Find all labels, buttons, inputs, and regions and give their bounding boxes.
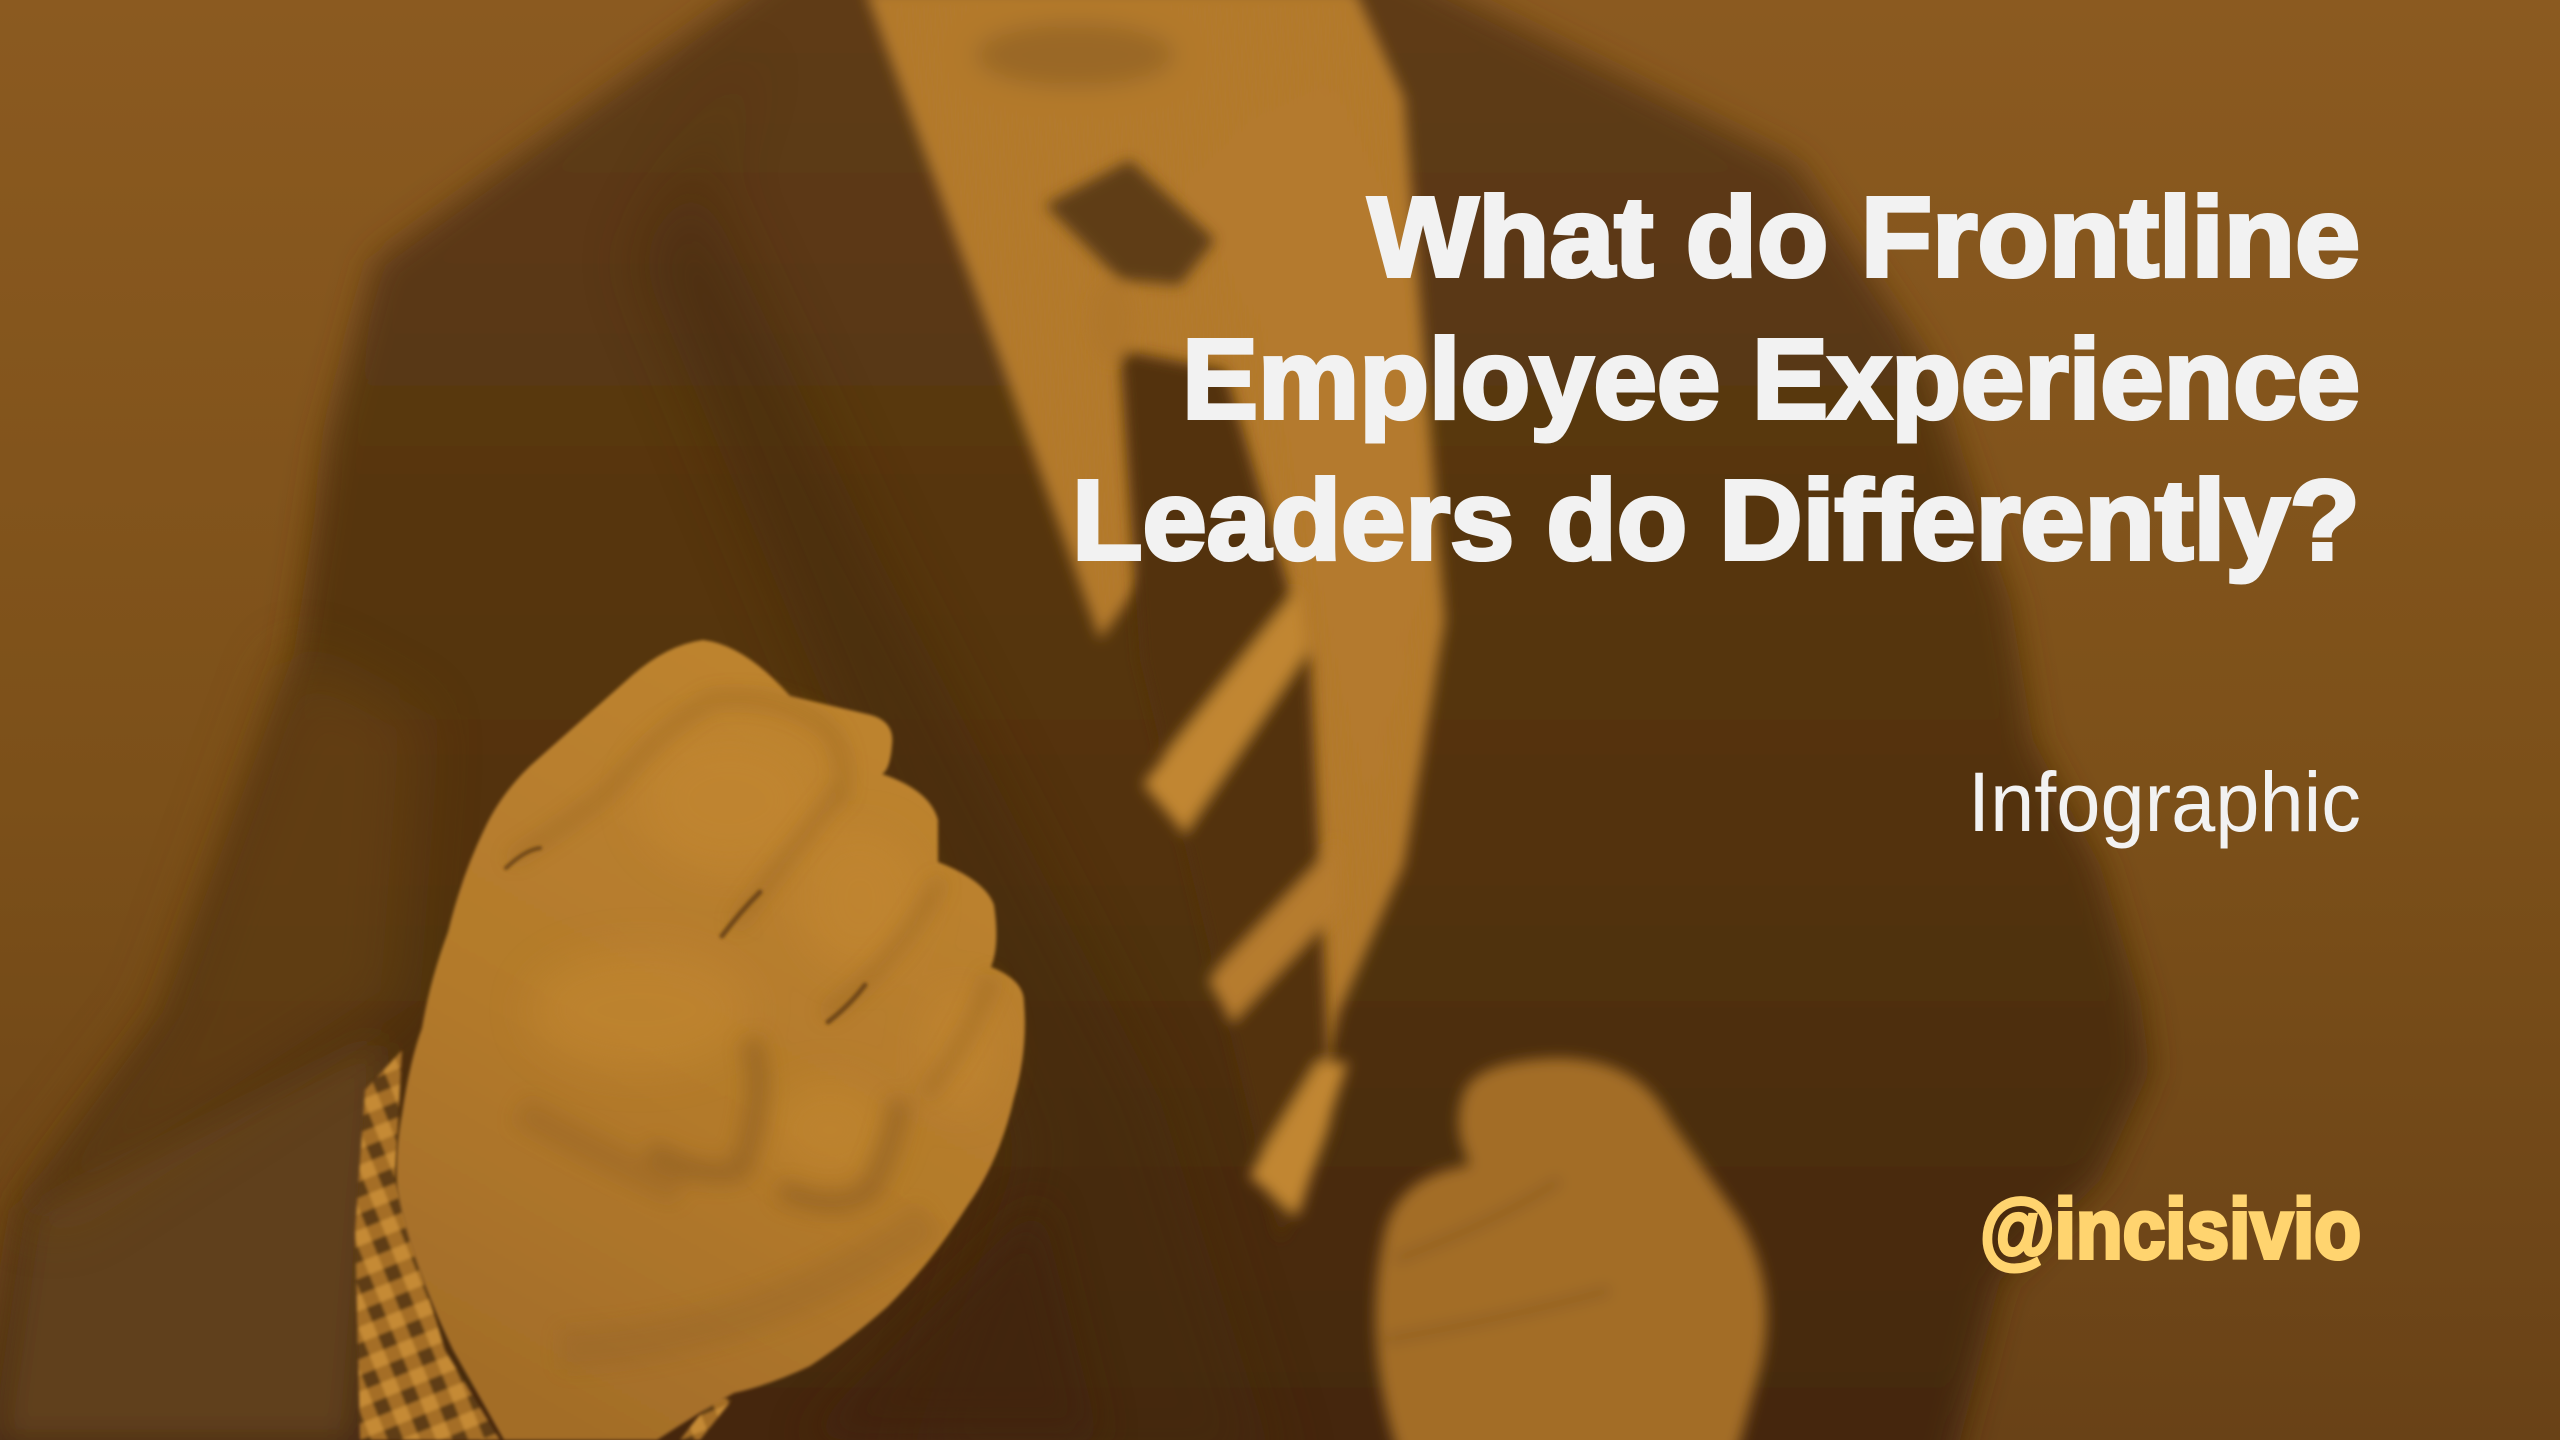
handle: @incisivio	[1980, 1182, 2361, 1276]
title line 3: Leaders do Differently?	[1072, 457, 2360, 583]
tie stripe 1	[1143, 588, 1306, 833]
title	[1072, 174, 2360, 583]
title line 2: Employee Experience	[1182, 316, 2360, 442]
fist shadow on jacket	[800, 1200, 1100, 1440]
tie knot	[1045, 160, 1215, 285]
tie stripe 2	[1208, 842, 1340, 1022]
photo: lighter left arm	[16, 653, 420, 1220]
photo: necktie	[1045, 160, 1348, 1240]
rear fist finger creases	[1385, 1180, 1610, 1340]
thumb and knuckle shading	[510, 698, 992, 1350]
photo: darker lapel shading	[640, 40, 1280, 1440]
subtitle: Infographic	[1968, 755, 2361, 849]
hand silhouette	[397, 640, 1025, 1440]
cuff sliver right	[680, 1395, 732, 1440]
finger creases	[506, 848, 865, 1022]
collar button	[1090, 278, 1134, 362]
tie body	[1120, 350, 1332, 1240]
tie stripe 3	[1249, 1062, 1348, 1216]
photo: lighter sleeve	[0, 1040, 380, 1440]
photo: shirt	[865, 0, 1445, 1143]
photo: chin shadow	[975, 23, 1175, 87]
title line 1: What do Frontline	[1368, 174, 2360, 300]
photo: shirt highlight	[1190, 90, 1420, 780]
knuckle highlights	[530, 730, 995, 1180]
shirt cuff	[355, 1050, 500, 1440]
photo: small rear fist	[1375, 1058, 1767, 1440]
photo: front fist with cuff	[355, 640, 1100, 1440]
